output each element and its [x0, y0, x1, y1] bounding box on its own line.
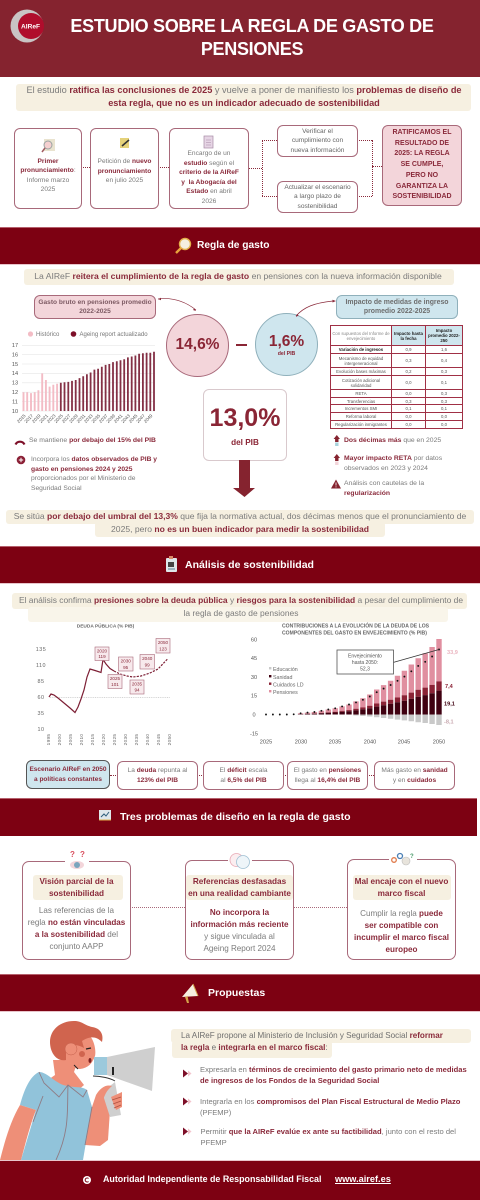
icon: arrow bullet 3: [182, 1127, 192, 1136]
card: vision parcial: [22, 861, 131, 960]
box: 13,0%: [203, 389, 287, 461]
card body: [354, 908, 449, 954]
card body: incumplir el marco fiscal: [354, 932, 449, 942]
box: escenario: a políticas constantes: [34, 776, 102, 782]
chart: deuda publica: 94: [134, 688, 140, 692]
footer: [0, 1160, 480, 1200]
title: [70, 16, 434, 59]
chart: deuda publica: 2015: [90, 734, 95, 745]
label: impacto medidas: promedio 2022-2025: [364, 308, 430, 315]
circle: 1,6%: del PIB: [278, 351, 295, 357]
table: impacto: 0,0: [406, 422, 411, 427]
proposal 3: PFEMP: [200, 1138, 227, 1147]
dotted connector: cards: [130, 907, 347, 908]
chart: deuda publica: 85: [38, 679, 44, 685]
bar chart: gasto pensiones: 14: [12, 371, 18, 377]
icon: megaphone small: [182, 984, 198, 1003]
icon: gears: [389, 852, 417, 866]
card body: Cumplir la regla puede: [360, 908, 443, 918]
bar chart: gasto pensiones: 2033: [83, 413, 94, 424]
table: impacto: Regularización inmigrantes: [335, 422, 387, 427]
connector lines: timeline: [83, 140, 382, 197]
chart: deuda publica: 2045: [156, 734, 161, 745]
white gap and icon: eye with question marks: ?: [70, 850, 75, 859]
table: impacto: [330, 325, 463, 429]
section title: Propuestas: [208, 986, 265, 998]
intro highlight band: [16, 84, 471, 111]
chart: contribuciones: 45: [251, 656, 257, 662]
chart: deuda publica: 119: [98, 654, 106, 659]
chart: deuda publica: 2025: [110, 676, 121, 681]
icon: magnifier on chart: [42, 139, 55, 152]
bar chart: gasto pensiones: 2031: [76, 413, 87, 424]
card: mal encaje: [347, 859, 456, 960]
bullet: mayor impacto: Mayor impacto RETA por datos: [344, 455, 442, 462]
bullet: dos decimas: Dos décimas más que en 2025: [344, 437, 441, 444]
icon: magnifier: [175, 238, 192, 254]
chart: contribuciones: [250, 622, 458, 746]
table: impacto: Variación de ingresos: [339, 347, 383, 352]
chart: deuda publica: 2030: [123, 734, 128, 745]
chart: contribuciones: 2035: [329, 740, 341, 746]
box: sanidad: [374, 761, 455, 790]
proposal 1: [200, 1064, 467, 1086]
chart: deuda publica: 2035: [134, 734, 139, 745]
card heading: [355, 877, 448, 898]
AIReF logo: AIReF: [21, 24, 40, 30]
bar chart: gasto pensiones: 11: [12, 400, 18, 406]
table: impacto: 0,1: [406, 406, 411, 411]
lead text: El análisis confirma presiones sobre la deuda pública y riesgos para la sostenibilidad a pesar del cumplimiento de: [19, 595, 463, 605]
footer url: www.airef.es: [335, 1174, 391, 1184]
card heading: [188, 877, 291, 898]
AIReF logo: [10, 10, 44, 42]
proposals intro: [181, 1030, 443, 1054]
card heading: Referencias desfasadas: [193, 877, 286, 886]
label: impacto medidas: [336, 295, 458, 319]
chart: deuda publica: 2020: [97, 648, 108, 654]
chart: deuda publica: 95: [123, 665, 129, 670]
bullet: analisis: [344, 480, 424, 497]
circle: 1,6%: 1,6%: [269, 333, 304, 350]
lead band: [24, 269, 454, 285]
box: pensiones: llega al 16,4% del PIB: [295, 776, 360, 784]
card heading: Mal encaje con el nuevo: [355, 877, 448, 886]
intro text: esta regla, que no es un indicador adecuado de sostenibilidad: [108, 98, 380, 108]
chart: deuda publica: 110: [36, 663, 46, 669]
icon: gears: ?: [410, 854, 414, 860]
bar chart: gasto pensiones: 2045: [128, 413, 139, 424]
box: sanidad: Más gasto en sanidad: [381, 767, 448, 774]
bullet: incorpora: proporcionados por el Ministerio de: [31, 475, 135, 482]
bar chart: gasto pensiones: 15: [12, 362, 18, 368]
box: conclusion: SOSTENIBILIDAD: [392, 193, 452, 200]
chart: deuda publica: 2010: [79, 734, 84, 745]
lead band second line: [28, 607, 448, 622]
proposal 1: de ingresos de los Fondos de la Seguridad Social: [200, 1076, 379, 1085]
bullet: incorpora: gasto en pensiones 2024 y 2025: [31, 466, 132, 473]
bar chart: gasto pensiones: 2025: [53, 413, 64, 424]
table: impacto: Transferencias: [347, 398, 375, 404]
chart: contribuciones: Sanidad: [273, 675, 292, 681]
box: actualizar: Actualizar el escenario: [284, 184, 351, 191]
arrow: down: [233, 460, 255, 497]
chart: deuda publica: 1995: [46, 734, 51, 745]
box: conclusion: RATIFICAMOS EL: [392, 129, 451, 136]
proposal 2: [200, 1096, 460, 1118]
box: peticion: Petición de nuevo: [98, 158, 151, 165]
chart: deuda publica: 135: [36, 647, 46, 653]
card body: europeo: [386, 944, 417, 954]
bullet: mayor impacto: [344, 455, 442, 472]
lead text: [19, 595, 463, 618]
chart: contribuciones: hasta 2050:: [352, 660, 378, 666]
chart: deuda publica: 2035: [132, 682, 143, 686]
bar chart: gasto pensiones: 17: [12, 343, 18, 349]
bar chart: gasto pensiones: Histórico: [36, 332, 60, 338]
table: impacto: 0,3: [441, 398, 447, 404]
label: gasto bruto: Gasto bruto en pensiones promedio: [38, 299, 152, 306]
box: escenario: Escenario AIReF en 2050: [29, 766, 107, 773]
chart: contribuciones: Cuidados LD: [273, 682, 304, 688]
bullet: mayor impacto: observados en 2023 y 2024: [344, 465, 428, 472]
bar chart: gasto pensiones: [12, 331, 155, 424]
chart: contribuciones: CONTRIBUCIONES A LA EVOLUCIÓN DE LA DEUDA DE LOS: [282, 622, 430, 630]
label: impacto medidas: Impacto de medidas de ingreso: [345, 298, 448, 306]
box: deuda: 123% del PIB: [137, 776, 178, 784]
chart: contribuciones: 2040: [364, 740, 376, 746]
box: peticion: en julio 2025: [106, 177, 143, 184]
minus sign: [236, 344, 247, 346]
intro text: El estudio ratifica las conclusiones de 2025 y vuelve a poner de manifiesto los problemas de diseño de: [26, 85, 462, 95]
card heading: en una realidad cambiante: [188, 889, 291, 898]
box: deuda: La deuda repunta al: [128, 767, 187, 774]
table: impacto: Evolución bases máximas: [336, 369, 386, 374]
card body: ser compatible con: [365, 920, 438, 930]
chart: deuda publica: 2040: [145, 734, 150, 745]
box: conclusion: PERO NO: [406, 172, 438, 179]
box: encargo: Encargo de un: [188, 150, 230, 157]
section header: analisis: [0, 546, 480, 584]
label: gasto bruto: [34, 295, 156, 319]
bar chart: gasto pensiones: 2043: [120, 413, 131, 424]
conclusion text: Se sitúa por debajo del umbral del 13,3% que fija la normativa actual, dos décimas menos que el pronunciamiento de: [14, 511, 466, 521]
icon: clipboard: [166, 556, 177, 572]
proposal 1: Expresarla en términos de crecimiento del gasto primario neto de medidas: [200, 1065, 467, 1074]
chart: deuda publica: 2050: [167, 734, 172, 745]
intro band second line: [172, 1041, 332, 1058]
bar chart: gasto pensiones: 2039: [105, 413, 117, 424]
icon: chart board: [99, 810, 111, 820]
card body: regla no están vinculadas: [28, 918, 125, 926]
bullet: incorpora: [31, 456, 157, 492]
box: encargo: Estado en abril: [186, 188, 232, 195]
box: primer pronunciamiento: pronunciamiento:: [20, 167, 76, 174]
intro band: [171, 1029, 471, 1043]
card heading: [39, 877, 114, 898]
chart: contribuciones: 2045: [398, 740, 410, 746]
card heading: Visión parcial de la: [39, 877, 114, 886]
box: primer pronunciamiento: Informe marzo: [27, 176, 69, 184]
box: primer pronunciamiento: 2025: [41, 186, 55, 193]
box: verificar: cumplimiento con: [292, 137, 343, 144]
table: impacto: Impacto hasta la fecha: [394, 330, 423, 340]
chart: deuda publica: [36, 622, 172, 746]
box: actualizar: [277, 181, 358, 213]
footer text: Autoridad Independiente de Responsabilidad Fiscal: [103, 1174, 321, 1184]
icon: up arrow 2: [334, 454, 340, 465]
table: impacto: Reforma laboral: [346, 414, 376, 419]
table: impacto: Incrementos SMI: [345, 406, 377, 411]
bar chart: gasto pensiones: 2049: [143, 413, 154, 424]
table: impacto: Cotización adicional solidaridad: [342, 378, 380, 388]
chart: deuda publica: 2020: [101, 734, 106, 745]
chart: contribuciones: 19,1: [444, 702, 455, 708]
bullet: analisis: Análisis con cautelas de la: [344, 480, 424, 487]
box: 13,0%: del PIB: [231, 438, 259, 447]
icon: clipboard: [204, 136, 214, 148]
chart: deuda publica: 2030: [121, 658, 131, 664]
bar chart: gasto pensiones: 2029: [68, 413, 79, 424]
proposal 2: Integrarla en los compromisos del Plan Fiscal Estructural de Medio Plazo: [200, 1096, 460, 1106]
white gap and icon: eye with question marks: [65, 850, 89, 869]
icon: overlapping circles: [228, 853, 252, 869]
icon: arrow bullet 2: [182, 1097, 192, 1106]
table: impacto: RETA: [355, 391, 367, 396]
icon: footer logo: [82, 1174, 92, 1184]
conclusion text: [14, 511, 466, 534]
chart: deuda publica: 2005: [68, 734, 73, 745]
bar chart: gasto pensiones: 13: [12, 380, 18, 386]
box: encargo: criterio de la AIReF: [179, 169, 239, 176]
card heading: marco fiscal: [378, 889, 425, 898]
box: deficit: [203, 761, 284, 790]
table: impacto: 0,4: [441, 358, 447, 363]
box: conclusion: RESULTADO DE: [395, 140, 449, 147]
chart: contribuciones: COMPONENTES DEL GASTO EN ENVEJECIMIENTO (% PIB): [282, 630, 427, 636]
icon: arrow bullet 1: [182, 1069, 192, 1078]
bullet: incorpora: Seguridad Social: [31, 485, 82, 492]
box: pensiones: [287, 761, 368, 790]
box: encargo: [169, 128, 249, 209]
chart: contribuciones: Envejecimiento: [348, 654, 382, 660]
chart: deuda publica: 99: [145, 662, 150, 668]
chart: contribuciones: Educación: [273, 667, 298, 673]
bar chart: gasto pensiones: 2017: [23, 413, 35, 424]
proposal 3: [200, 1126, 456, 1148]
chart: contribuciones: 2025: [260, 740, 272, 746]
proposal 2: (PFEMP): [200, 1108, 231, 1116]
table: impacto: 0,9: [406, 347, 411, 352]
proposals intro: la regla e integrarla en el marco fiscal:: [181, 1043, 328, 1052]
intro text: [26, 85, 462, 108]
chart: deuda publica: 35: [38, 711, 44, 717]
chart: deuda publica: 2040: [142, 656, 153, 661]
bullet: analisis: regularización: [344, 490, 390, 497]
box: actualizar: a largo plazo de: [294, 193, 341, 200]
dotted connectors: escenario row: [110, 775, 374, 776]
heading band: [353, 875, 451, 900]
section header: tres problemas: [0, 798, 476, 836]
table: impacto: 0,0: [406, 391, 411, 396]
box: verificar: Verificar el: [302, 128, 333, 135]
label: gasto bruto: 2022-2025: [79, 308, 111, 315]
section title: Tres problemas de diseño en la regla de gasto: [120, 810, 350, 822]
header banner: [0, 0, 480, 77]
heading band: [33, 875, 123, 900]
title: ESTUDIO SOBRE LA REGLA DE GASTO DE: [70, 16, 434, 36]
bullet: incorpora: Incorpora los datos observados de PIB y: [31, 456, 157, 463]
chart: contribuciones: -15: [250, 732, 258, 738]
chart: deuda publica: 101: [111, 682, 119, 687]
table: impacto: Impacto promedio 2022-250: [428, 328, 460, 343]
bar chart: gasto pensiones: Ageing report actualizado: [80, 332, 148, 338]
illustration: person with megaphone: [0, 1012, 160, 1160]
arrow: gasto to circle: [158, 298, 196, 311]
chart: deuda publica: 60: [38, 695, 44, 701]
lead band: [6, 510, 474, 524]
section header: propuestas: [0, 974, 480, 1012]
chart: deuda publica: 10: [38, 727, 44, 733]
box: pensiones: El gasto en pensiones: [294, 767, 361, 774]
card body: conjunto AAPP: [50, 942, 104, 950]
box: deficit: al 6,5% del PIB: [220, 776, 267, 784]
chart: contribuciones: -8,1: [444, 720, 454, 726]
card body: información más reciente: [190, 920, 289, 929]
box: peticion: [90, 128, 159, 209]
table: impacto: 0,3: [406, 398, 411, 404]
card body: [28, 906, 125, 950]
card body: a la sostenibilidad del: [35, 930, 118, 938]
bar chart: gasto pensiones: 2019: [31, 413, 42, 424]
bullet: por debajo del 15%: Se mantiene por debajo del 15% del PIB: [29, 437, 156, 444]
bar chart: gasto pensiones: 2015: [16, 413, 27, 424]
table: impacto: 0,2: [406, 369, 411, 374]
chart: contribuciones: 52,3: [360, 666, 370, 672]
box: peticion: pronunciamiento: [98, 168, 151, 175]
box: primer pronunciamiento: Primer: [38, 158, 58, 164]
box: actualizar: sostenibilidad: [298, 203, 337, 210]
lead band: [12, 593, 467, 609]
white gap and icon: eye with question marks: ?: [80, 850, 85, 859]
proposal 3: Permitir que la AIReF evalúe ex ante su factibilidad, junto con el resto del: [200, 1127, 456, 1136]
box: deuda: [117, 761, 198, 790]
bar chart: gasto pensiones: 16: [12, 352, 18, 358]
arrow: impacto to circle: [296, 300, 336, 317]
table: impacto: 0,1: [441, 380, 447, 385]
box: deficit: El déficit escala: [219, 767, 268, 774]
chart: contribuciones: 33,9: [447, 650, 458, 656]
chart: contribuciones: 30: [251, 675, 257, 681]
table: impacto: Con supuestos del Informe de envejecimiento: [332, 330, 390, 340]
box: verificar: [277, 125, 358, 157]
chart: contribuciones: 2030: [295, 740, 307, 746]
table: impacto: 0,0: [441, 414, 447, 419]
section header: regla de gasto: [0, 227, 480, 265]
card body: y sigue vinculada al: [204, 932, 275, 941]
section title: Regla de gasto: [197, 240, 269, 251]
box: conclusion: [382, 125, 462, 206]
lead text: la regla de gasto de pensiones: [184, 608, 298, 618]
icon: up arrow 1: [334, 435, 340, 446]
table: impacto: 0,1: [441, 406, 447, 411]
chart: contribuciones: 2050: [433, 740, 445, 746]
card: referencias: [185, 860, 294, 960]
table: impacto: 0,0: [406, 414, 411, 419]
chart: contribuciones: 0: [252, 712, 256, 718]
bar chart: gasto pensiones: 2047: [135, 413, 146, 424]
card body: Ageing Report 2024: [204, 944, 276, 953]
box: conclusion: SE CUMPLE,: [401, 161, 443, 168]
lead band second line: [95, 522, 385, 537]
icon: plus: [16, 456, 26, 464]
box: primer pronunciamiento: [14, 128, 82, 209]
box: verificar: nueva información: [291, 147, 344, 154]
box: 13,0%: 13,0%: [210, 404, 280, 432]
chart: contribuciones: 7,4: [445, 684, 454, 690]
chart: contribuciones: Pensiones: [273, 690, 298, 696]
chart: deuda publica: DEUDA PÚBLICA (% PIB): [77, 622, 135, 630]
table: impacto: 0,0: [406, 380, 411, 385]
bar chart: gasto pensiones: 2027: [61, 413, 72, 424]
box: encargo: estudio según el: [184, 160, 234, 166]
card body: [190, 908, 289, 953]
bar chart: gasto pensiones: 2021: [38, 413, 49, 424]
circle: 14,6%: [166, 314, 229, 377]
chart: deuda publica: 2050: [158, 640, 169, 645]
lead text: La AIReF reitera el cumplimiento de la regla de gasto en pensiones con la nueva información disponible: [34, 271, 442, 281]
chart: deuda publica: 123: [159, 646, 167, 652]
circle: 14,6%: 14,6%: [176, 336, 219, 353]
chart: contribuciones: 60: [251, 638, 257, 644]
box: escenario: [26, 760, 110, 789]
chart: deuda publica: 2000: [57, 734, 62, 745]
table: impacto: 0,3: [406, 358, 411, 363]
conclusion text: 2025, pero no es un buen indicador para medir la sostenibilidad: [111, 524, 369, 534]
table: impacto: Mecanismo de equidad intergeneracional: [339, 356, 383, 366]
table: impacto: 0,3: [441, 369, 447, 374]
chart: contribuciones: 15: [251, 694, 257, 700]
bar chart: gasto pensiones: 2035: [91, 413, 102, 424]
table: impacto: 1,6: [441, 347, 447, 352]
chart: deuda publica: 2025: [112, 734, 117, 745]
bar chart: gasto pensiones: 2041: [113, 413, 124, 424]
icon: dome: [14, 440, 26, 445]
icon: warning: [331, 480, 341, 488]
table: impacto: 0,0: [441, 422, 447, 427]
circle: 1,6%: [255, 313, 318, 376]
bar chart: gasto pensiones: 2023: [46, 413, 57, 424]
title: PENSIONES: [201, 39, 303, 59]
bar chart: gasto pensiones: 10: [12, 409, 18, 415]
bar chart: gasto pensiones: 12: [12, 390, 18, 396]
proposals intro: La AIReF propone al Ministerio de Inclusión y Seguridad Social reformar: [181, 1031, 443, 1040]
card body: Las referencias de la: [39, 906, 114, 914]
bar chart: gasto pensiones: 2037: [98, 413, 109, 424]
box: conclusion: GARANTIZA LA: [396, 183, 448, 190]
box: sanidad: y en cuidados: [393, 776, 436, 784]
icon: note and pencil: [120, 138, 130, 148]
box: conclusion: 2025: LA REGLA: [394, 150, 450, 157]
box: encargo: 2026: [202, 198, 216, 204]
card heading: sostenibilidad: [49, 889, 104, 898]
table: impacto: 0,3: [441, 391, 447, 396]
card body: No incorpora la: [210, 908, 269, 917]
section title: Análisis de sostenibilidad: [185, 559, 314, 571]
heading band: [186, 875, 293, 900]
box: encargo: y la Abogacía del: [181, 178, 237, 186]
